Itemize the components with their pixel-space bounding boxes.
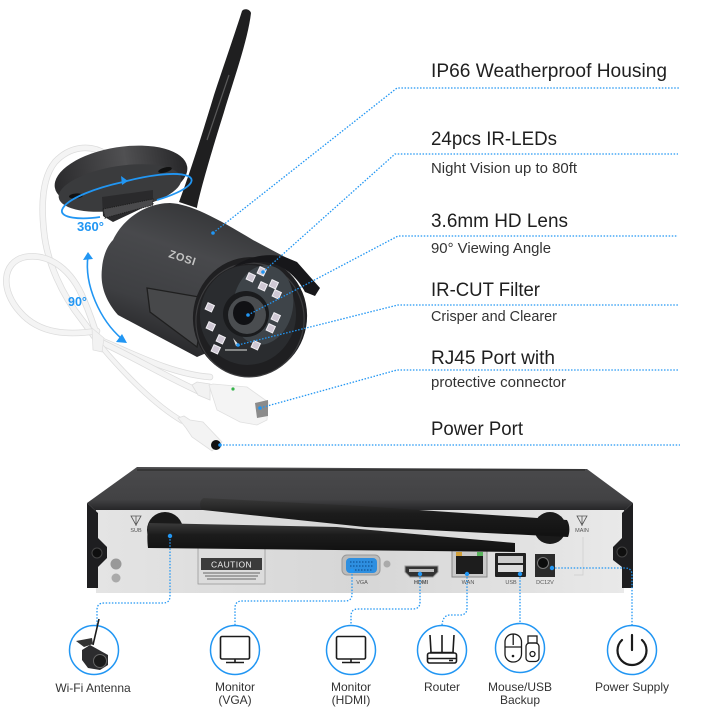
- callout: RJ45: [258, 348, 678, 410]
- power connector: [178, 416, 222, 451]
- caution label: CAUTION: [211, 560, 252, 570]
- callout: IR-LEDs: [261, 129, 678, 274]
- callout: IP66: [211, 61, 680, 235]
- SUB antenna mark: SUB: [130, 528, 142, 534]
- USB port: USB: [505, 580, 517, 586]
- NVR recorder: [87, 467, 633, 593]
- item: Mouse/USB Backup: Mouse/USB: [488, 680, 552, 694]
- rear panel: [96, 510, 624, 593]
- label 90: 90°: [68, 295, 87, 309]
- item: Wi-Fi Antenna: Wi-Fi Antenna: [55, 681, 131, 695]
- rear antenna: [147, 523, 515, 552]
- icon: monitor: [220, 636, 250, 662]
- callout: IP66: IP66 Weatherproof Housing: [431, 61, 667, 82]
- callout: IR-LEDs: 24pcs IR-LEDs: [431, 129, 557, 150]
- item: Monitor VGA: Monitor: [215, 680, 255, 694]
- DC port: [535, 554, 555, 586]
- connector: HDMI: [351, 572, 422, 625]
- callout: power port: [218, 419, 680, 447]
- HDMI port: [405, 566, 438, 586]
- lens: [223, 291, 269, 337]
- top cover: [87, 467, 633, 513]
- label 360: 360°: [77, 219, 104, 234]
- HDMI port: HDMI: [414, 580, 428, 586]
- callout: power port: Power Port: [431, 419, 524, 440]
- connector: DC: [550, 566, 632, 625]
- callout: RJ45: protective connector: [431, 374, 566, 391]
- icon: monitor: [336, 636, 366, 662]
- icon: mouse and USB: [505, 634, 539, 662]
- side panel: [147, 288, 205, 347]
- DC port: DC12V: [536, 580, 554, 586]
- icon: mini camera: [76, 619, 108, 670]
- front antenna: [200, 498, 569, 537]
- rotation arrow 90: [68, 252, 127, 343]
- MAIN antenna mark: [575, 516, 589, 534]
- item: Router: Router: [424, 680, 460, 694]
- callout: IR-CUT: Crisper and Clearer: [431, 308, 557, 325]
- VGA port: VGA: [356, 580, 368, 586]
- callout: IR-CUT: IR-CUT Filter: [431, 280, 541, 301]
- item: Monitor HDMI: Monitor: [331, 680, 371, 694]
- ZOSI logo: ZOSI: [167, 248, 197, 269]
- item: Monitor VGA: [210, 626, 260, 707]
- wall mount: [50, 137, 192, 222]
- antenna bases: [147, 512, 183, 548]
- item: Wi-Fi Antenna: [55, 619, 131, 695]
- connector: Wi-Fi antenna: [97, 534, 172, 625]
- item: Router: [418, 626, 466, 694]
- connector: WAN: [442, 572, 469, 625]
- callout: lens: 3.6mm HD Lens: [431, 211, 568, 232]
- item: Monitor HDMI: (HDMI): [332, 693, 370, 707]
- VGA port: [342, 555, 390, 586]
- icon: power: [618, 635, 646, 665]
- callout: lens: [246, 211, 678, 317]
- LEDs: [205, 267, 281, 354]
- antenna on camera: [179, 9, 251, 208]
- connector: VGA: [235, 569, 354, 625]
- WAN port: WAN: [462, 580, 474, 586]
- RJ45 connector: [192, 382, 268, 425]
- item: Power Supply: Power Supply: [595, 680, 669, 694]
- camera body: [102, 203, 320, 386]
- rotation arrow 360: [62, 174, 192, 234]
- item: Monitor HDMI: [326, 626, 376, 707]
- item: Monitor VGA: (VGA): [218, 693, 252, 707]
- hood: [233, 255, 320, 296]
- icon: router: [428, 635, 456, 663]
- connector: USB: [518, 572, 522, 623]
- caution label: [198, 548, 265, 584]
- item: Mouse/USB Backup: [488, 624, 552, 707]
- item: Power Supply: [595, 626, 669, 694]
- SUB antenna mark: [130, 516, 142, 534]
- callout: IR-CUT: [236, 280, 678, 347]
- front ring: [183, 248, 317, 386]
- item: Mouse/USB Backup: Backup: [500, 693, 540, 707]
- WAN port: [452, 550, 487, 586]
- USB port: [495, 553, 526, 586]
- cables: [6, 148, 210, 421]
- callout: IR-LEDs: Night Vision up to 80ft: [431, 160, 578, 177]
- callout: lens: 90° Viewing Angle: [431, 240, 551, 257]
- MAIN antenna mark: MAIN: [575, 528, 589, 534]
- callout: RJ45: RJ45 Port with: [431, 348, 555, 369]
